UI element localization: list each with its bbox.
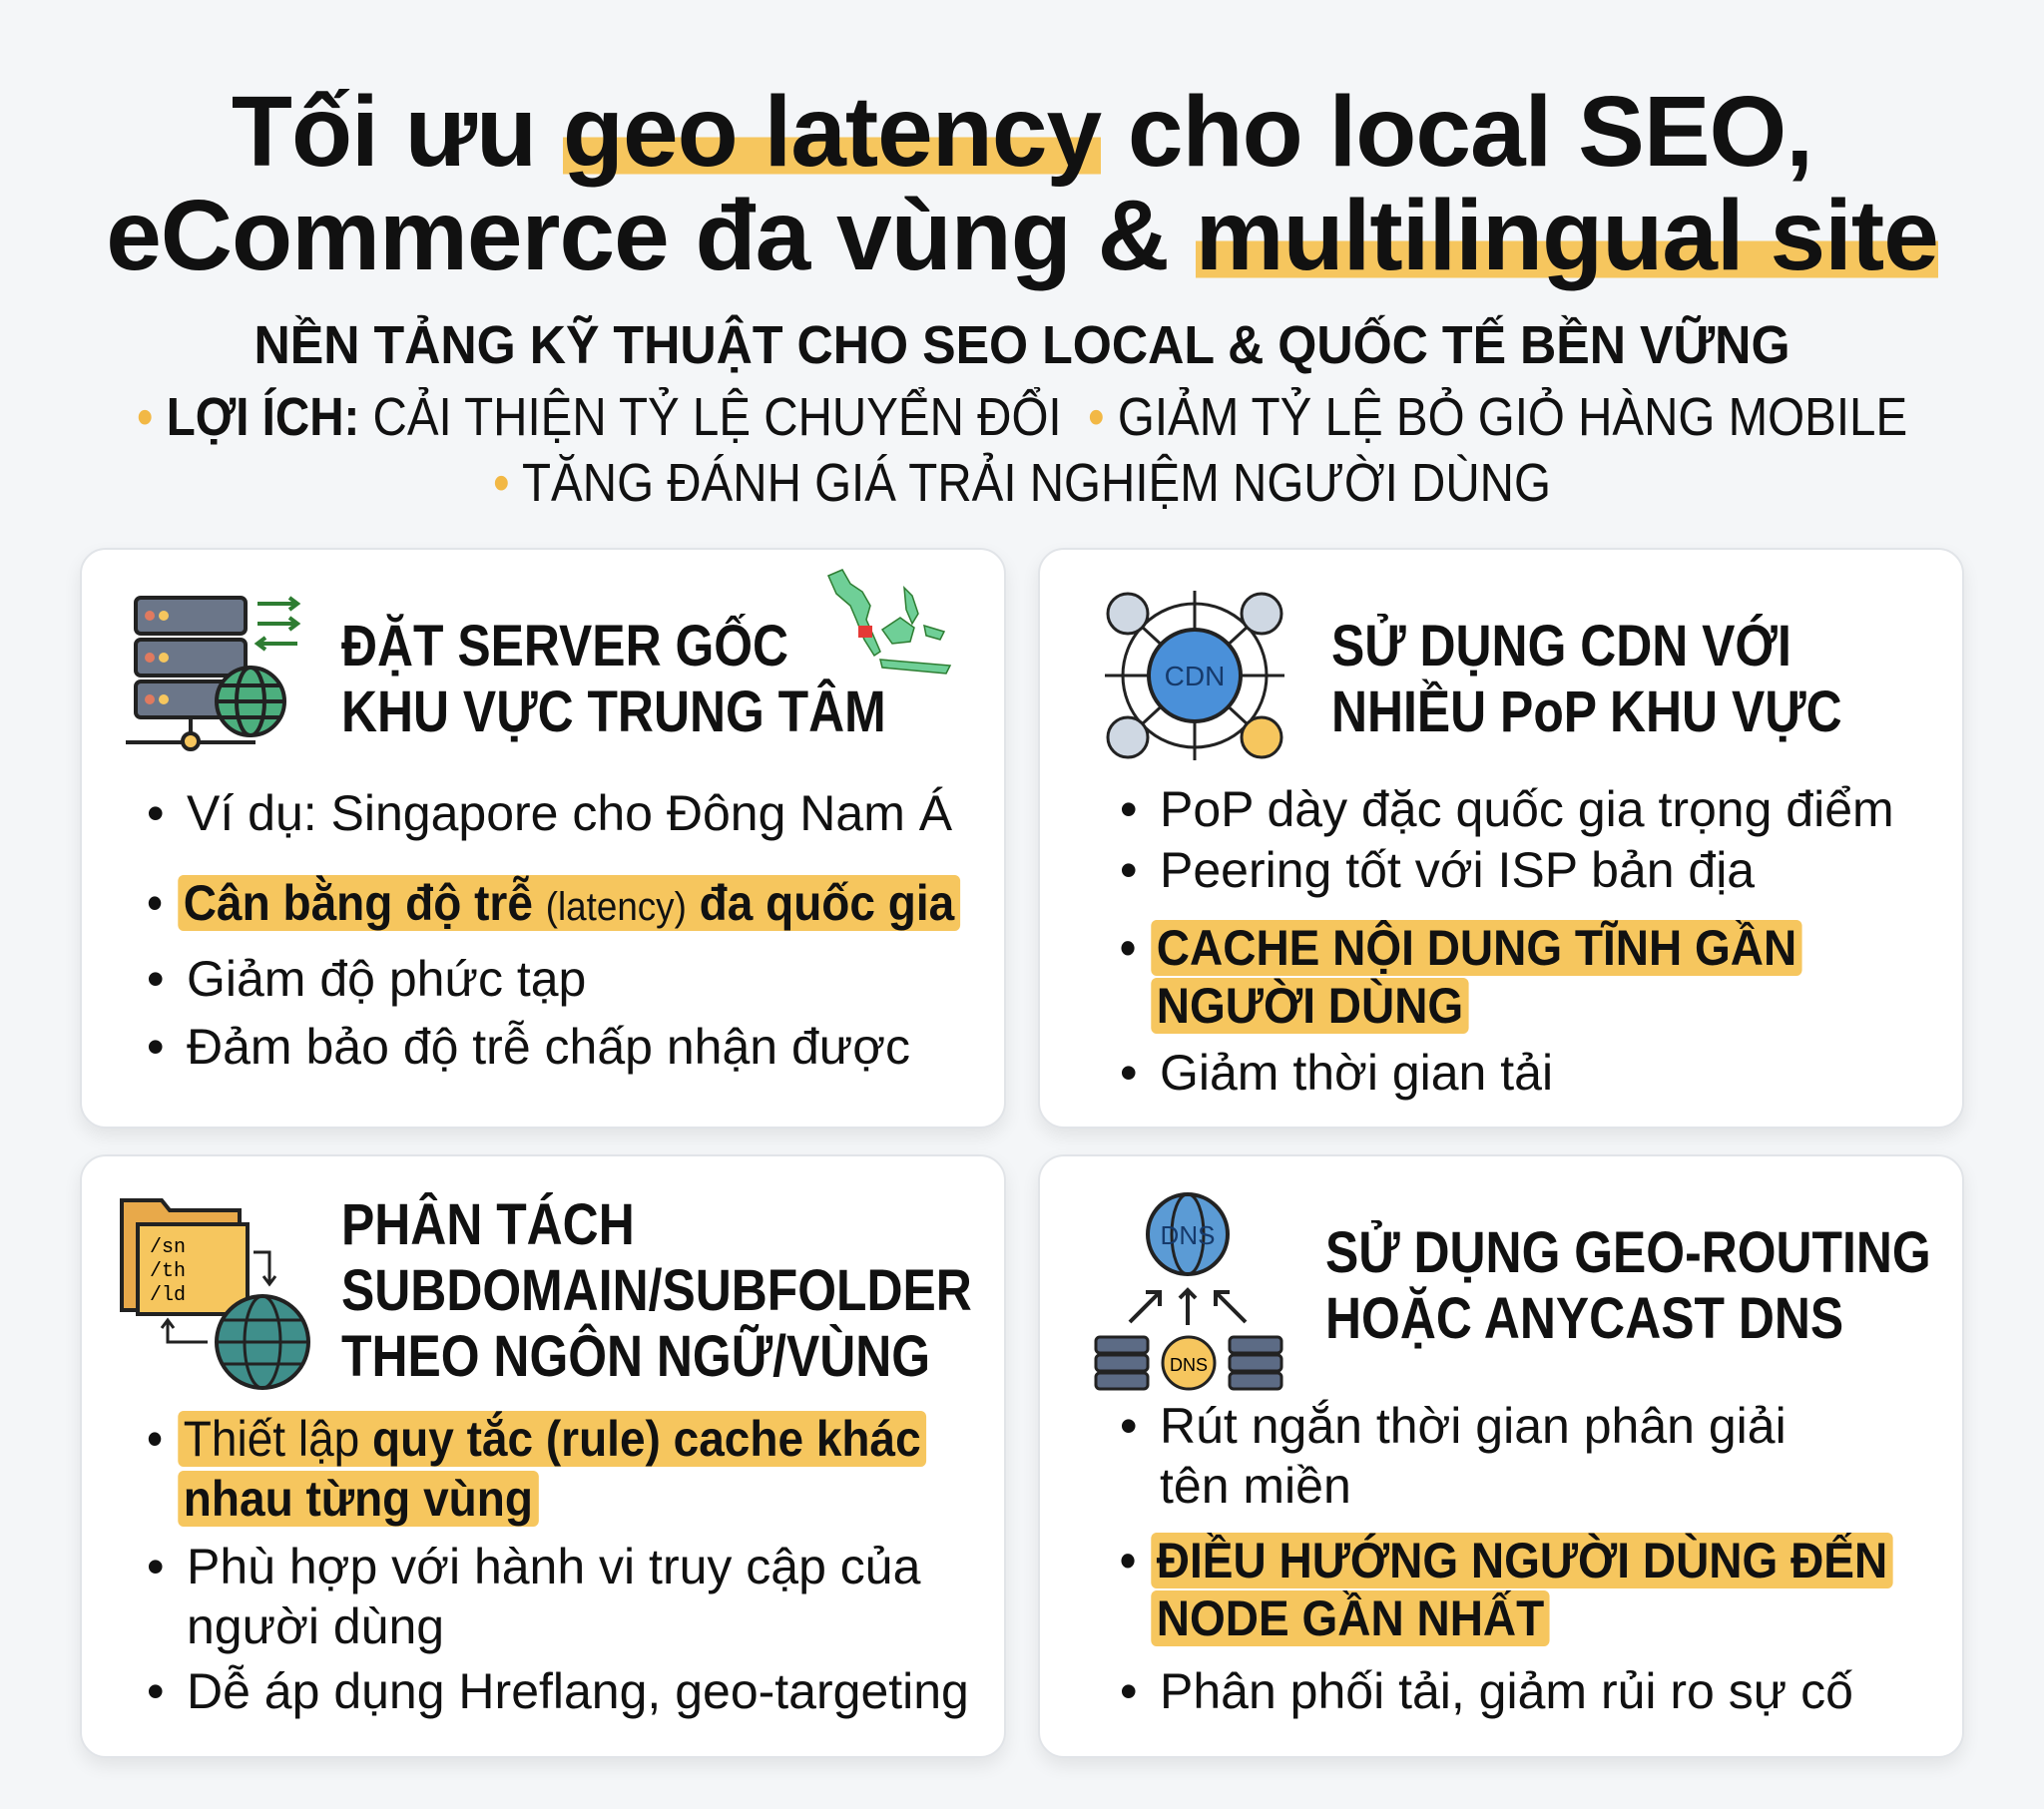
panel: subdomain: Phù hợp với hành vi truy cập của <box>187 1539 920 1594</box>
heading: SỬ DỤNG GEO-ROUTING <box>1325 1220 1931 1285</box>
icon: SEA map <box>827 569 952 675</box>
icon: folders globe: /ld <box>150 1284 186 1307</box>
icon: DNS routing: DNS <box>1170 1355 1208 1375</box>
icon: folders globe: /th <box>150 1260 186 1283</box>
panel: CDN <box>1038 548 1964 1129</box>
benefits: • TĂNG ĐÁNH GIÁ TRẢI NGHIỆM NGƯỜI DÙNG <box>493 453 1551 513</box>
title: Tối ưu geo latency cho local SEO, <box>232 76 1812 188</box>
panel: server <box>80 548 1006 1129</box>
icon: DNS routing <box>1094 1192 1283 1391</box>
panel: CDN: PoP dày đặc quốc gia trọng điểm <box>1160 781 1894 837</box>
heading <box>1325 1220 1931 1351</box>
icon: CDN network <box>1105 591 1284 760</box>
bullets <box>1121 781 1894 1101</box>
heading: KHU VỰC TRUNG TÂM <box>341 679 886 744</box>
panel: geo-routing: Rút ngắn thời gian phân giải <box>1160 1398 1787 1454</box>
panel: subdomain: Thiết lập quy tắc (rule) cache khác <box>184 1411 921 1467</box>
benefits <box>137 387 1907 513</box>
heading: NHIỀU PoP KHU VỰC <box>1331 679 1842 744</box>
panel: server: Ví dụ: Singapore cho Đông Nam Á <box>187 785 952 841</box>
panel: server: Giảm độ phức tạp <box>187 951 586 1007</box>
panel: CDN: CACHE NỘI DUNG TĨNH GẦN <box>1157 920 1796 976</box>
panel: subdomain: người dùng <box>187 1598 444 1654</box>
bullets <box>148 1411 969 1719</box>
panel: CDN: Peering tốt với ISP bản địa <box>1160 842 1755 898</box>
icon: folders globe <box>120 1198 310 1390</box>
heading <box>341 1192 972 1389</box>
heading: PHÂN TÁCH <box>341 1192 635 1257</box>
panel: geo-routing: ĐIỀU HƯỚNG NGƯỜI DÙNG ĐẾN <box>1157 1533 1887 1588</box>
title: eCommerce đa vùng & multilingual site <box>106 180 1938 291</box>
icon: server globe <box>126 596 301 751</box>
icon: folders globe: /sn <box>150 1236 186 1259</box>
panel: geo-routing: tên miền <box>1160 1458 1351 1514</box>
benefits: • LỢI ÍCH: CẢI THIỆN TỶ LỆ CHUYỂN ĐỔI • GIẢM TỶ LỆ BỎ GIỎ HÀNG MOBILE <box>137 387 1907 447</box>
panel: subdomain: Dễ áp dụng Hreflang, geo-targeting <box>187 1663 969 1719</box>
panel: server: Cân bằng độ trễ (latency) đa quốc gia <box>184 875 954 931</box>
heading <box>1331 614 1842 744</box>
title <box>106 76 1938 291</box>
heading: THEO NGÔN NGỮ/VÙNG <box>341 1324 930 1389</box>
heading: SỬ DỤNG CDN VỚI <box>1331 614 1791 678</box>
bullets <box>1121 1398 1893 1719</box>
heading: ĐẶT SERVER GỐC <box>341 614 788 678</box>
icon: CDN network: CDN <box>1165 661 1225 691</box>
icon: DNS routing: DNS <box>1161 1220 1215 1250</box>
panel: subdomain <box>80 1154 1006 1758</box>
panel: geo-routing: NODE GẦN NHẤT <box>1157 1590 1544 1646</box>
panel: subdomain: nhau từng vùng <box>184 1471 533 1527</box>
heading: SUBDOMAIN/SUBFOLDER <box>341 1258 972 1323</box>
subtitle: NỀN TẢNG KỸ THUẬT CHO SEO LOCAL & QUỐC TẾ BỀN VỮNG <box>254 315 1790 375</box>
bullets <box>148 785 960 1075</box>
panel: geo-routing: Phân phối tải, giảm rủi ro sự cố <box>1160 1663 1853 1719</box>
panel: geo-routing <box>1038 1154 1964 1758</box>
heading <box>341 614 886 744</box>
heading: HOẶC ANYCAST DNS <box>1325 1286 1843 1351</box>
panel: CDN: Giảm thời gian tải <box>1160 1045 1553 1101</box>
panel: CDN: NGƯỜI DÙNG <box>1157 978 1463 1034</box>
panel: server: Đảm bảo độ trễ chấp nhận được <box>187 1019 910 1075</box>
